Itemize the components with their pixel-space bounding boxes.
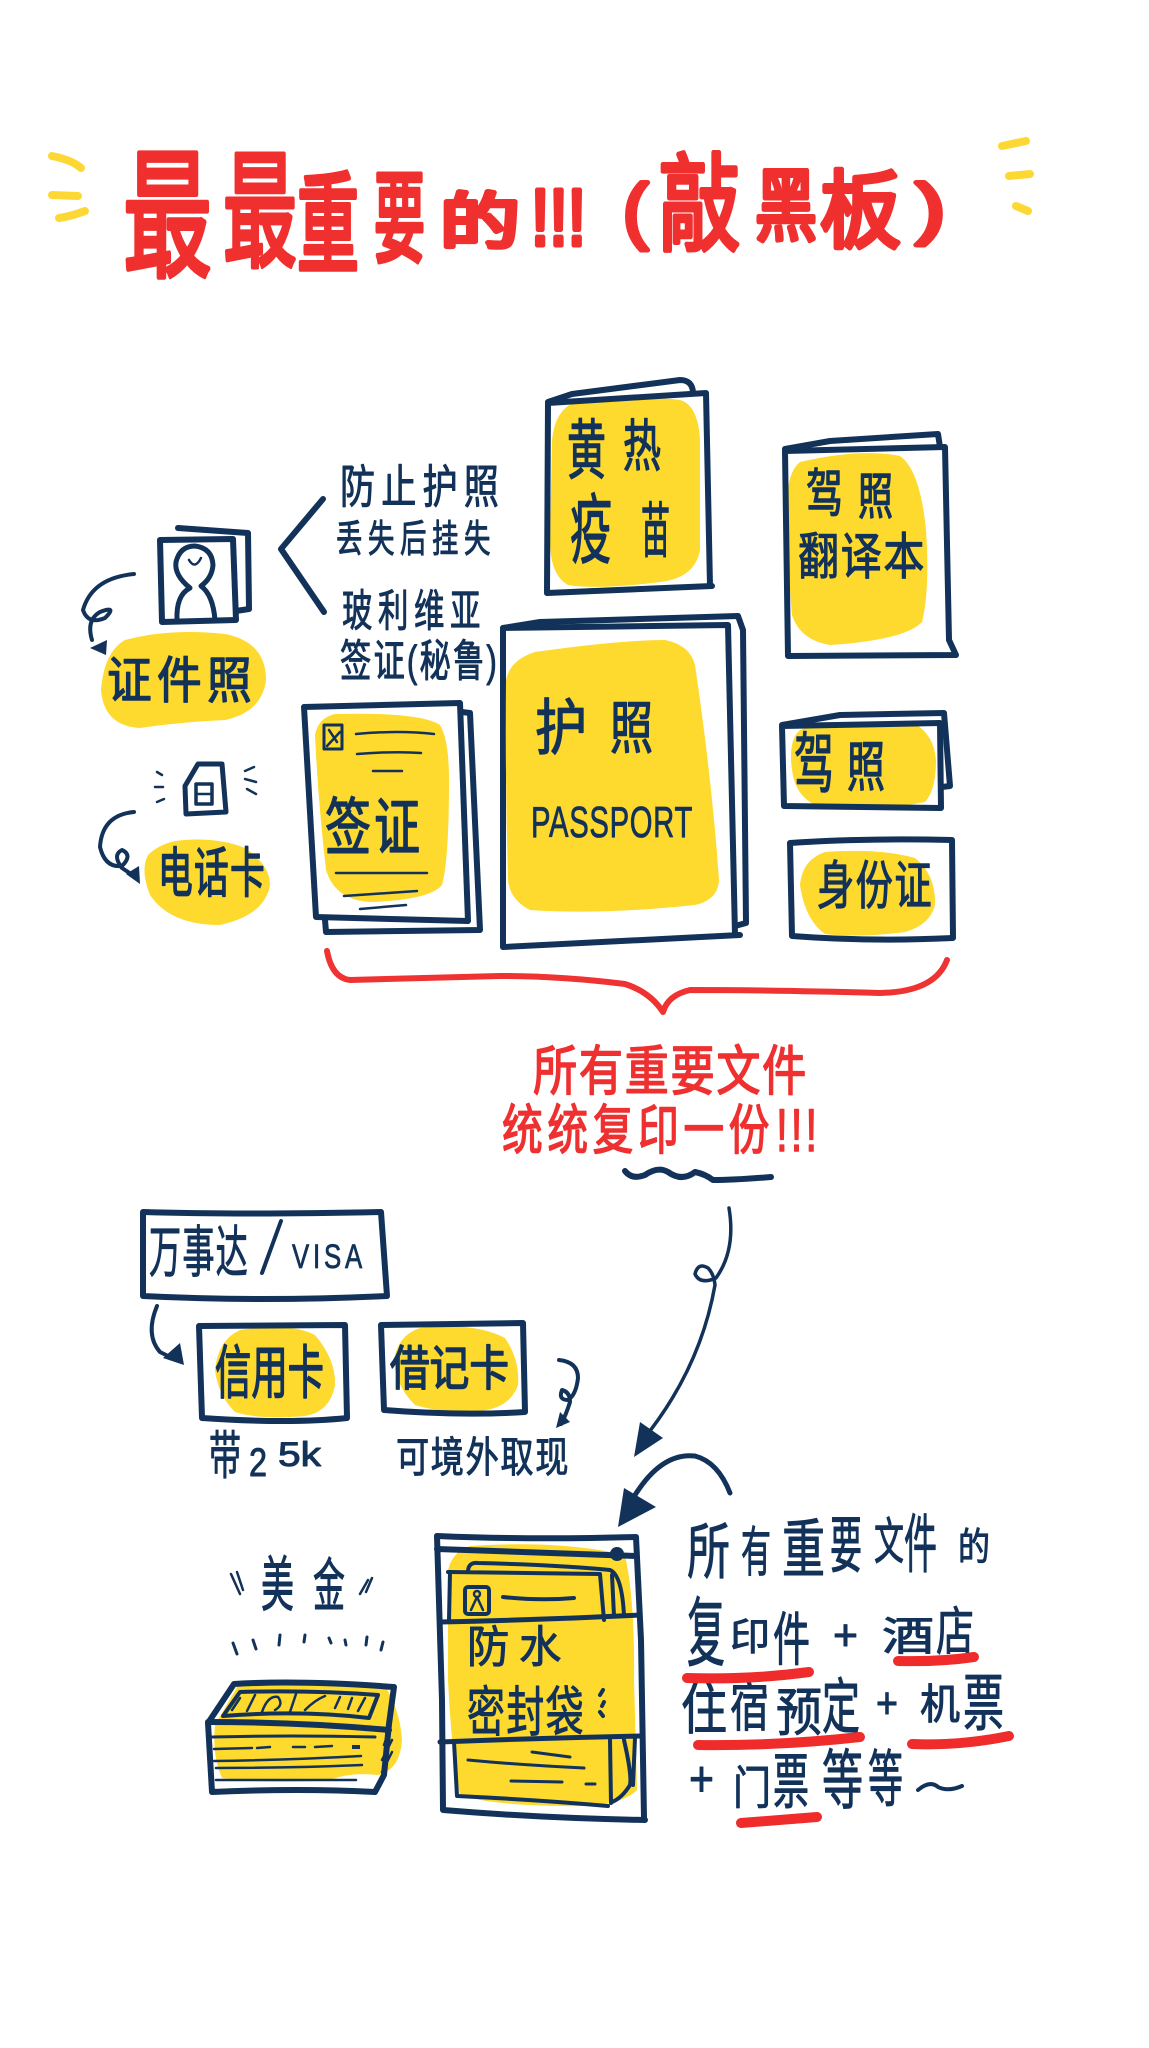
arrow: debit note xyxy=(556,1360,578,1428)
text: all copies and bookings: 印 xyxy=(730,1617,770,1659)
text: all copies and bookings xyxy=(681,1509,1004,1817)
text: all copies and bookings: 门 xyxy=(733,1762,771,1814)
text: all copies and bookings: 票 xyxy=(963,1670,1004,1739)
document: visa: 签证 xyxy=(325,794,423,863)
callout: photocopy all documents: !!! xyxy=(776,1097,820,1164)
text: all copies and bookings: 店 xyxy=(936,1604,974,1662)
card: debit card xyxy=(381,1323,525,1414)
note: purpose of passport photos: 玻利维亚 xyxy=(342,587,486,636)
note: credit card amount: 2 xyxy=(249,1441,267,1485)
arrow: to credit card xyxy=(152,1306,184,1365)
callout: photocopy all documents: 所有重要文件 xyxy=(533,1042,808,1102)
card: debit card: 借记卡 xyxy=(390,1343,509,1396)
chevron xyxy=(281,499,324,612)
note: purpose of passport photos: 防止护照 xyxy=(340,461,505,513)
label: phone card xyxy=(144,840,270,925)
document: yellow fever vaccine: 疫 xyxy=(570,489,612,574)
document: yellow fever vaccine xyxy=(547,380,712,593)
document: passport: 照 xyxy=(610,697,653,761)
document: license translation xyxy=(785,434,956,656)
title: 板 xyxy=(820,165,901,260)
text: all copies and bookings: 酒 xyxy=(882,1615,934,1659)
document: license translation: 驾 xyxy=(806,466,843,524)
icon: SIM card xyxy=(155,764,256,814)
box: card brands xyxy=(143,1212,387,1299)
title: 要 xyxy=(374,164,425,276)
text: all copies and bookings: 有 xyxy=(741,1523,771,1583)
arrow: photo to label xyxy=(83,574,134,655)
text: all copies and bookings: 重 xyxy=(782,1514,825,1586)
title: 最 xyxy=(123,139,212,296)
title: 最 xyxy=(223,142,297,284)
text: all copies and bookings: 件 xyxy=(773,1608,810,1673)
document: passport xyxy=(503,616,746,947)
icon: waterproof sealed bag: 密封袋 xyxy=(467,1683,585,1743)
note: credit card amount: 5k xyxy=(278,1436,322,1474)
arrow: curved to the bag xyxy=(618,1456,730,1527)
arrow: down to the bag xyxy=(634,1208,731,1457)
document: yellow fever vaccine: 苗 xyxy=(641,498,670,565)
text: all copies and bookings: 件 xyxy=(904,1509,937,1581)
label: ID photo xyxy=(101,632,266,728)
document: driving license xyxy=(782,713,950,808)
label: US dollars: 金 xyxy=(313,1554,345,1619)
red underlines xyxy=(687,1657,1009,1823)
box: card brands: 万事达 xyxy=(149,1221,249,1284)
title: ) xyxy=(916,171,945,246)
text: all copies and bookings: + xyxy=(876,1679,898,1728)
card: credit card xyxy=(199,1325,347,1421)
note: credit card amount: 带 xyxy=(209,1428,241,1486)
label: US dollars xyxy=(231,1552,383,1654)
text: all copies and bookings: 机 xyxy=(920,1681,960,1728)
brace: all documents xyxy=(327,951,947,1012)
label: ID photo: 证件照 xyxy=(107,653,257,709)
text: all copies and bookings: 所 xyxy=(687,1518,730,1586)
icon: stack of dollars xyxy=(208,1681,402,1792)
text: all copies and bookings: 定 xyxy=(822,1674,860,1741)
icon: waterproof sealed bag: 防水 xyxy=(467,1623,571,1672)
box: card brands: VISA xyxy=(292,1238,366,1276)
document: driving license: 照 xyxy=(847,738,885,798)
text: all copies and bookings: 等 xyxy=(822,1744,863,1817)
icon: ID photos xyxy=(160,528,249,622)
title: 敲 xyxy=(659,147,740,265)
text: all copies and bookings: + xyxy=(689,1751,714,1807)
document: visa xyxy=(304,703,480,932)
right sparkle marks xyxy=(1002,141,1030,211)
callout: photocopy all documents xyxy=(502,1042,820,1164)
arrow: SIM to label xyxy=(100,812,140,884)
title: 黑 xyxy=(755,162,817,251)
note: credit card amount xyxy=(209,1428,322,1486)
document: yellow fever vaccine: 热 xyxy=(623,415,661,478)
text: all copies and bookings: 要 xyxy=(830,1512,862,1581)
left sparkle marks xyxy=(52,156,85,218)
label: US dollars: 美 xyxy=(261,1552,294,1619)
title: !!! xyxy=(531,173,586,262)
document: ID card xyxy=(790,839,953,940)
note: purpose of passport photos xyxy=(336,461,505,686)
note: purpose of passport photos: 签证(秘鲁) xyxy=(340,637,499,686)
title xyxy=(123,139,945,296)
title: 的 xyxy=(440,188,520,256)
document: license translation: 翻译本 xyxy=(798,529,926,585)
text: all copies and bookings: 住 xyxy=(681,1678,727,1741)
text: all copies and bookings: 票 xyxy=(773,1749,809,1816)
text: all copies and bookings: 等 xyxy=(868,1746,903,1815)
text: all copies and bookings: 文 xyxy=(874,1514,904,1570)
card: credit card: 信用卡 xyxy=(215,1341,324,1406)
text: all copies and bookings: + xyxy=(833,1611,858,1660)
text: all copies and bookings: 的 xyxy=(958,1527,990,1569)
document: passport: PASSPORT xyxy=(531,798,693,847)
callout: photocopy all documents: 统统复印一份 xyxy=(502,1101,774,1161)
document: yellow fever vaccine: 黄 xyxy=(567,414,606,487)
title: ( xyxy=(623,171,648,251)
document: driving license: 驾 xyxy=(794,727,834,801)
icon: waterproof sealed bag xyxy=(437,1536,645,1820)
title: 重 xyxy=(297,165,359,288)
document: license translation: 照 xyxy=(858,469,893,525)
text: all copies and bookings: 预 xyxy=(776,1685,822,1743)
document: passport: 护 xyxy=(535,694,587,762)
text: all copies and bookings: 复 xyxy=(687,1592,725,1677)
text: all copies and bookings: 宿 xyxy=(730,1678,769,1738)
note: debit card withdrawal: 可境外取现 xyxy=(396,1434,570,1481)
document: ID card: 身份证 xyxy=(817,858,933,916)
note: purpose of passport photos: 丢失后挂失 xyxy=(336,519,496,561)
label: phone card: 电话卡 xyxy=(158,844,266,904)
wavy underline xyxy=(625,1170,771,1180)
